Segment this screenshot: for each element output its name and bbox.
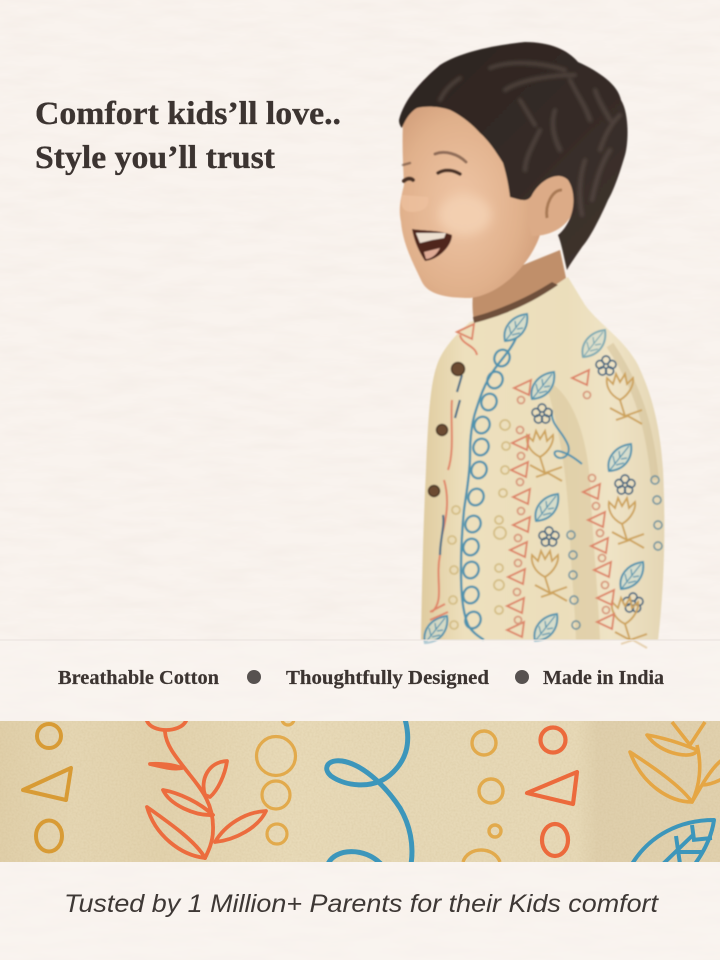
fabric motif: ochre shapes left <box>23 724 71 852</box>
kurta print: blue vine <box>461 338 516 640</box>
kurta buttons <box>428 362 464 496</box>
face <box>400 92 545 298</box>
mouth <box>412 229 452 261</box>
fabric motif: coral sprig <box>147 721 266 858</box>
kurta print: lotus motifs <box>527 431 562 481</box>
photo: laughing boy in printed kurta <box>399 42 664 648</box>
fabric motif: coral shapes right <box>527 728 577 856</box>
cheek highlight <box>439 195 491 235</box>
kurta print: flowers <box>596 356 616 375</box>
fabric close-up band <box>0 713 720 864</box>
benefits strip <box>0 640 720 722</box>
title: Comfort kids’ll love.. <box>35 96 341 132</box>
separator dot <box>247 670 261 684</box>
nose <box>401 195 428 212</box>
eyes and brows <box>403 152 466 181</box>
title <box>35 96 341 176</box>
trust tagline: Tusted by 1 Million+ Parents for their Kids comfort <box>64 890 659 918</box>
kurta placket print and coral sprig <box>430 335 477 620</box>
hair highlights <box>440 63 620 215</box>
fabric motif: ochre rings <box>256 713 296 844</box>
ear <box>528 175 576 236</box>
trust tagline <box>0 862 720 960</box>
kurta print: triangles and rings <box>448 324 662 637</box>
title: Style you’ll trust <box>35 140 275 176</box>
separator dot <box>515 670 529 684</box>
fabric motif: blue loop <box>327 719 412 864</box>
fabric motif: ochre rings centre <box>463 731 503 862</box>
kurta <box>421 277 664 648</box>
kurta print: leaves <box>504 314 527 341</box>
fabric motif: orange sprig right <box>630 722 720 802</box>
neck <box>472 250 566 322</box>
benefit: made in india: Made in India <box>543 667 664 689</box>
benefit: thoughtfully designed: Thoughtfully Designed <box>286 667 489 689</box>
benefit: breathable cotton: Breathable Cotton <box>58 667 219 689</box>
hair <box>399 42 628 270</box>
fabric motif: blue leaf <box>632 820 714 864</box>
